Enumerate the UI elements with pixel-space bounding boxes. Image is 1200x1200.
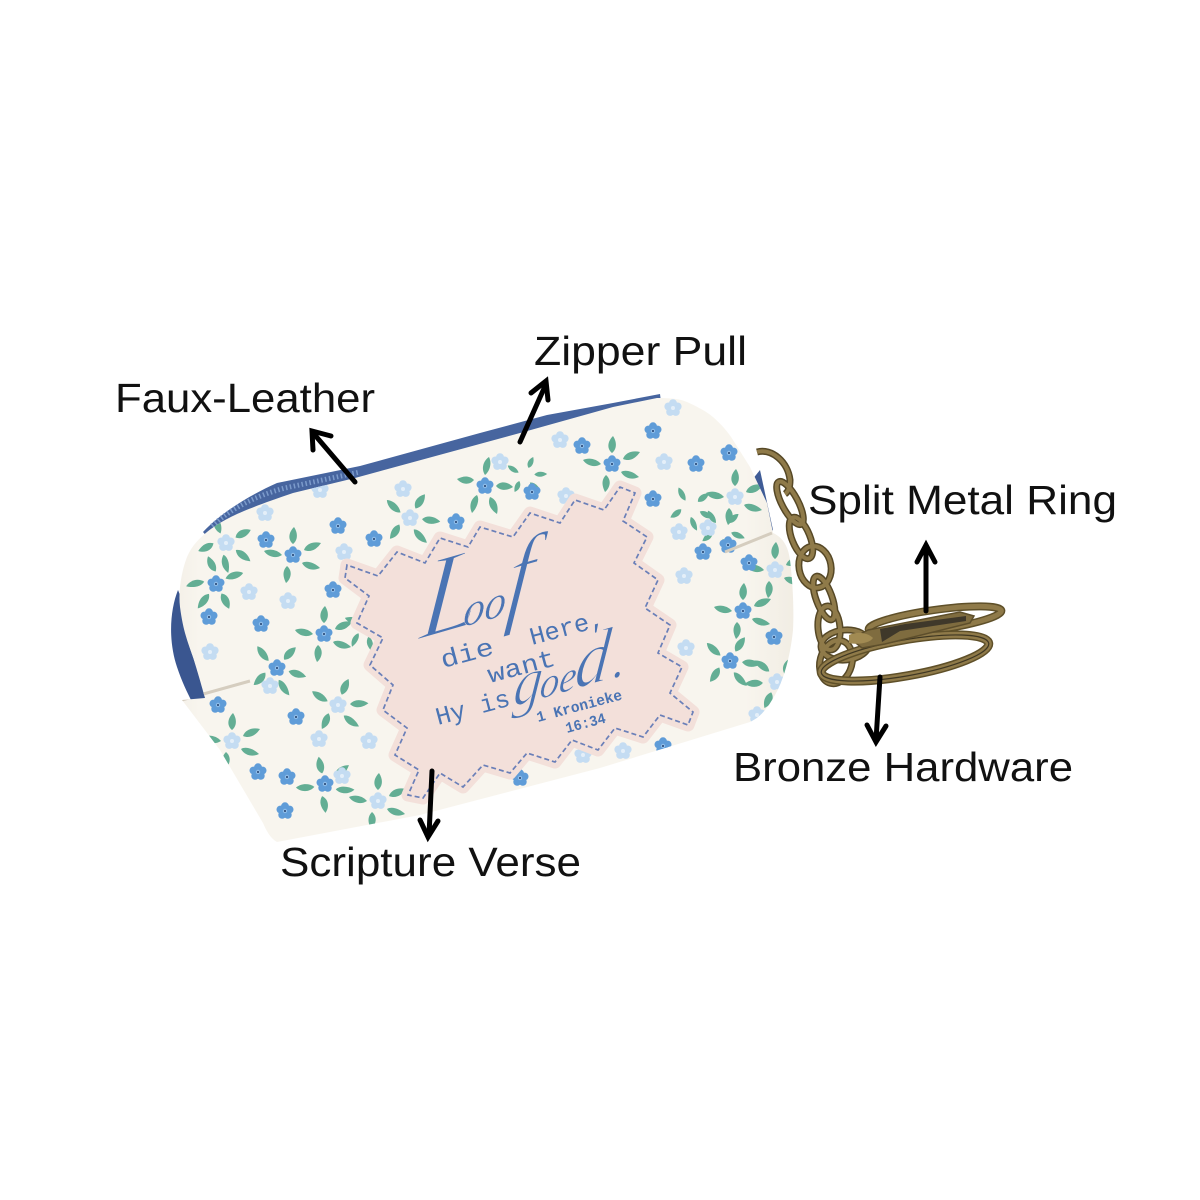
pouch xyxy=(171,394,794,842)
arrow: Split Metal Ring xyxy=(917,545,935,611)
label: Bronze Hardware: Bronze Hardware xyxy=(733,744,1073,790)
pouch body with floral print xyxy=(180,398,794,842)
scripture text: goed. xyxy=(510,607,630,725)
zipper teeth xyxy=(212,472,360,526)
pink scalloped verse patch xyxy=(345,487,693,798)
pale blue flowers xyxy=(201,399,786,809)
arrow: Scripture Verse xyxy=(420,771,438,837)
scripture text: Loof xyxy=(413,499,553,666)
scripture text: 16:34 xyxy=(564,711,608,738)
stitching xyxy=(345,487,693,798)
chain links xyxy=(757,451,870,687)
arrow: Zipper Pull xyxy=(520,381,548,442)
leaf sprigs xyxy=(178,305,815,829)
scripture text: 1 Kronieke xyxy=(535,688,624,727)
zipper: right end xyxy=(752,470,773,540)
zipper: top xyxy=(203,394,662,540)
scripture text: want xyxy=(485,645,559,691)
zipper: left end xyxy=(171,590,208,702)
blue forget-me-not flowers xyxy=(200,422,782,819)
clasp xyxy=(849,612,974,648)
scripture text: Here, xyxy=(527,605,607,653)
split metal rings xyxy=(818,601,1003,690)
keychain hardware xyxy=(757,451,1003,690)
label: Scripture Verse: Scripture Verse xyxy=(280,839,581,885)
label: Split Metal Ring: Split Metal Ring xyxy=(808,477,1117,523)
label: Faux-Leather: Faux-Leather xyxy=(115,375,375,421)
folded gusset shading xyxy=(178,681,250,701)
label: Zipper Pull: Zipper Pull xyxy=(534,328,747,374)
scripture text xyxy=(413,499,630,738)
arrow: Faux-Leather xyxy=(312,431,355,482)
scripture text: Hy is xyxy=(433,685,513,733)
arrow: Bronze Hardware xyxy=(867,677,886,742)
scripture text: die xyxy=(438,634,497,676)
